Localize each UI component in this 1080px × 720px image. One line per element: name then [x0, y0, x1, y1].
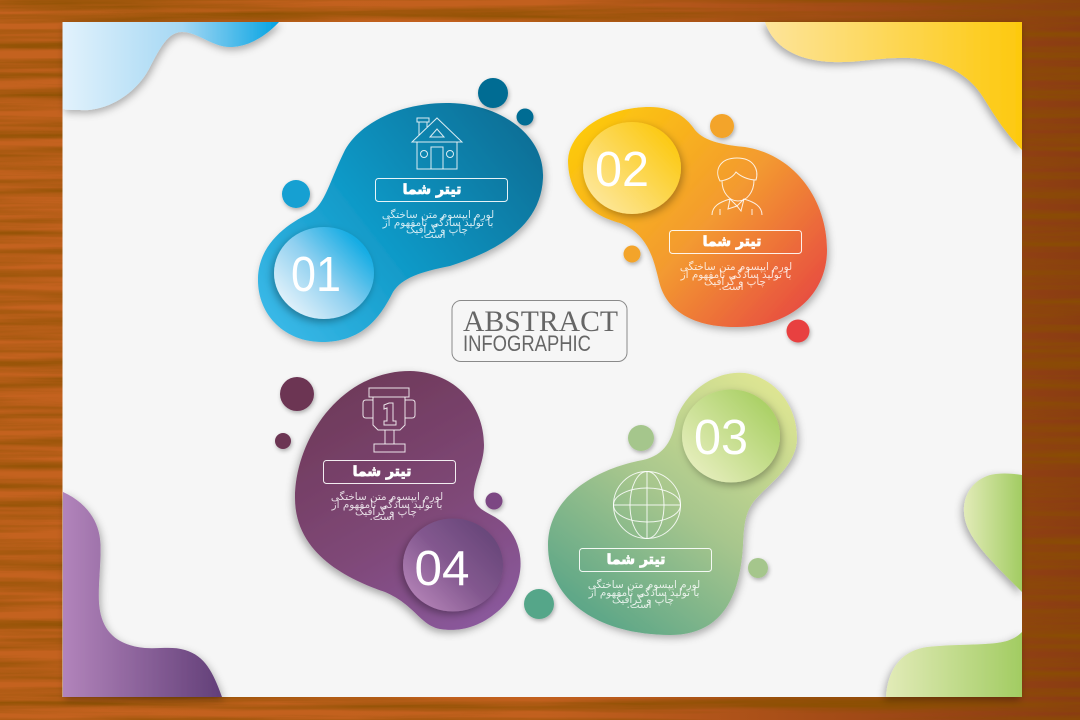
- icon: person: [712, 158, 762, 215]
- bubble: [280, 377, 314, 411]
- body text: چاپ و گرافیک: [704, 275, 766, 288]
- subtitle: INFOGRAPHIC: INFOGRAPHIC: [463, 331, 591, 356]
- number circle 03: [682, 390, 780, 482]
- panel 03: green blob: [524, 373, 797, 635]
- title bar: [376, 178, 508, 202]
- bubble: [524, 589, 554, 619]
- number circle 02: [583, 122, 681, 214]
- bubble: [710, 114, 734, 138]
- number 04: 04: [414, 542, 470, 596]
- center title box: [452, 300, 627, 362]
- number 02: 02: [595, 143, 649, 197]
- panel 02: yellow-orange blob: [568, 107, 827, 342]
- body text: لورم ایپسوم متن ساختگی: [680, 260, 792, 273]
- body text: است.: [420, 229, 446, 241]
- body text: با تولید سادگی نامفهوم از: [680, 268, 791, 281]
- body text: [382, 208, 494, 241]
- title text: تیتر شما: [353, 464, 411, 480]
- body text: چاپ و گرافیک: [355, 505, 417, 518]
- corner wave: green right: [964, 474, 1022, 592]
- corner wave: yellow top right: [765, 22, 1022, 150]
- title text: تیتر شما: [703, 234, 761, 250]
- title: ABSTRACT: ABSTRACT: [463, 305, 618, 338]
- number circle 01: [274, 227, 374, 319]
- body text: [680, 260, 792, 293]
- bubble: [275, 433, 291, 449]
- body text: با تولید سادگی نامفهوم از: [331, 498, 442, 511]
- bubble: [478, 78, 508, 108]
- body text: [588, 578, 700, 611]
- body text: چاپ و گرافیک: [406, 223, 468, 236]
- body text: لورم ایپسوم متن ساختگی: [382, 208, 494, 221]
- corner wave: purple bottom left: [63, 492, 222, 697]
- body text: [331, 490, 443, 523]
- title bar: [670, 230, 802, 254]
- corner wave: green bottom right: [886, 632, 1022, 697]
- number circle 04: [403, 518, 503, 612]
- title text: تیتر شما: [403, 182, 461, 198]
- body text: است.: [626, 599, 652, 611]
- icon: globe: [614, 472, 680, 538]
- body text: با تولید سادگی نامفهوم از: [382, 216, 493, 229]
- bubble: [486, 492, 502, 510]
- body text: با تولید سادگی نامفهوم از: [588, 586, 699, 599]
- bubble: [628, 425, 654, 451]
- title bar: [580, 548, 712, 572]
- icon: house: [412, 118, 462, 169]
- bubble: [786, 320, 810, 342]
- bubble: [748, 558, 768, 578]
- body text: لورم ایپسوم متن ساختگی: [331, 490, 443, 503]
- bubble: [282, 180, 310, 208]
- panel 01: blue blob: [258, 78, 543, 342]
- number 03: 03: [694, 411, 748, 465]
- bubble: [516, 108, 534, 126]
- title text: تیتر شما: [607, 552, 665, 568]
- body text: است.: [718, 281, 744, 293]
- bubble: [624, 246, 640, 262]
- number 01: 01: [291, 248, 341, 302]
- panel 04: purple blob: [275, 371, 521, 630]
- body text: چاپ و گرافیک: [612, 593, 674, 606]
- title bar: [324, 460, 456, 484]
- body text: لورم ایپسوم متن ساختگی: [588, 578, 700, 591]
- corner wave: blue top left: [62, 22, 279, 110]
- body text: است.: [369, 511, 395, 523]
- icon: trophy: [363, 388, 415, 452]
